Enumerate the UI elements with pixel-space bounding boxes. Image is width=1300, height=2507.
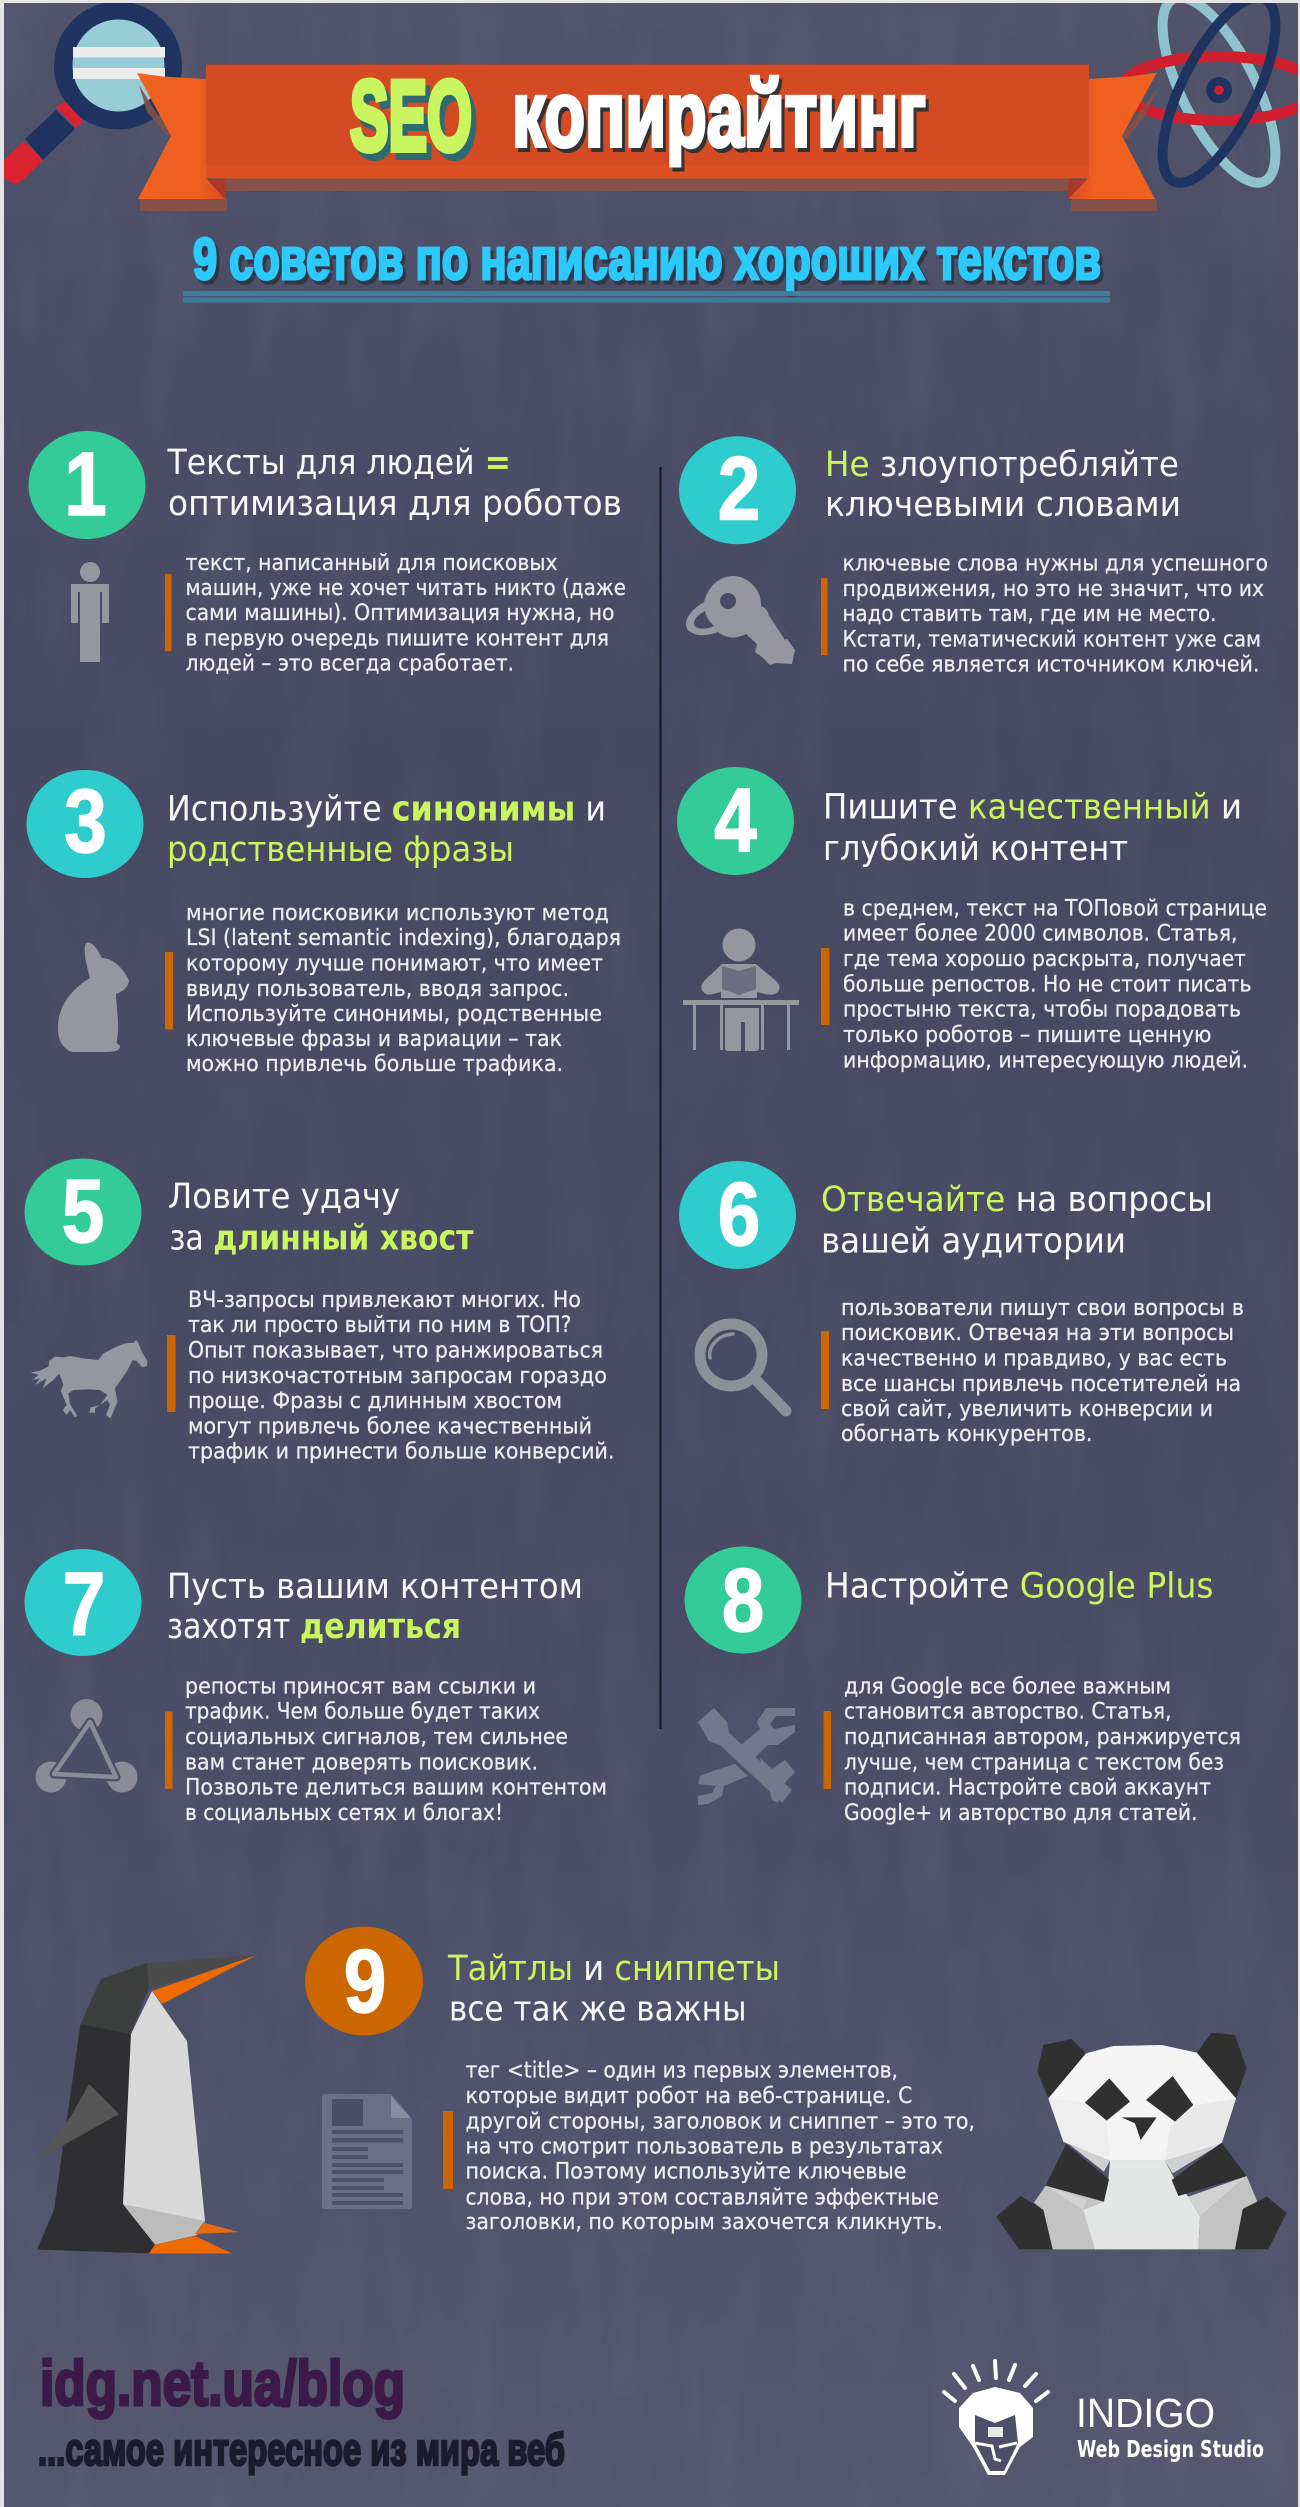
heading tip 7 (167, 1567, 583, 1647)
text tip 9: слова, но при этом составляйте эффектные (466, 2186, 939, 2210)
text tip 4: только роботов – пишите ценную (843, 1023, 1212, 1048)
title banner (137, 60, 1159, 211)
panel: tip 9 (305, 1926, 975, 2235)
heading tip 3: родственные фразы (167, 830, 514, 870)
text tip 4 (843, 896, 1267, 1074)
heading tip 2: Не злоупотребляйте (825, 445, 1179, 485)
text tip 9: заголовки, по которым захочется кликнуть. (466, 2210, 943, 2235)
text tip 3: можно привлечь больше трафика. (186, 1052, 563, 1077)
text tip 5 (188, 1288, 614, 1464)
text tip 8: становится авторство. Статья, (844, 1700, 1172, 1724)
heading tip 4 (823, 788, 1242, 869)
text tip 6: свой сайт, увеличить конверсии и (841, 1397, 1213, 1422)
heading tip 7: захотят делиться (167, 1607, 461, 1647)
subtitle underline (183, 291, 1110, 302)
panel: tip 5 (24, 1158, 614, 1464)
heading tip 1: Тексты для людей = (167, 443, 511, 483)
number badge 8: 8 (722, 1549, 764, 1650)
text tip 5: Опыт показывает, что ранжироваться (188, 1338, 603, 1364)
text tip 9: тег <title> – один из первых элементов, (466, 2058, 898, 2084)
text tip 8: лучше, чем страница с текстом без (844, 1750, 1224, 1776)
panel: tip 4 (677, 767, 1267, 1074)
number badge 1 (28, 431, 146, 539)
text tip 6: качественно и правдиво, у вас есть (841, 1346, 1227, 1372)
accent bar (165, 1712, 172, 1789)
text tip 3: многие поисковики используют метод (186, 901, 609, 926)
panel: tip 2 (679, 436, 1268, 678)
icon: magnifying glass (0, 2, 182, 183)
text tip 6: все шансы привлечь посетителей на (841, 1372, 1241, 1397)
text tip 7: в социальных сетях и блогах! (185, 1801, 503, 1826)
text tip 7 (185, 1674, 607, 1826)
number badge 3: 3 (64, 770, 107, 871)
number badge 4: 4 (714, 769, 757, 870)
icon: person (71, 562, 109, 662)
heading tip 5: Ловите удачу (168, 1177, 400, 1217)
number badge 9: 9 (344, 1930, 386, 2031)
heading tip 6: вашей аудитории (821, 1222, 1126, 1262)
text tip 5: трафик и принести больше конверсий. (188, 1440, 614, 1464)
illustration: penguin (37, 1955, 257, 2254)
text tip 9: другой стороны, заголовок и сниппет – это то, (466, 2110, 975, 2134)
text tip 3: ввиду пользователь, вводя запрос. (186, 977, 569, 1002)
icon: rabbit (58, 942, 129, 1052)
text tip 6: пользователи пишут свои вопросы в (841, 1296, 1244, 1321)
text tip 3: ключевые фразы и вариации – так (186, 1027, 562, 1052)
text tip 4: больше репостов. Но не стоит писать (843, 972, 1252, 998)
number badge 6 (679, 1161, 796, 1269)
text tip 9 (466, 2058, 975, 2235)
panel: tip 3 (26, 770, 621, 1077)
number badge 3 (26, 770, 144, 878)
text tip 4: где тема хорошо раскрыта, получает (843, 947, 1246, 972)
heading tip 4: Пишите качественный и (823, 788, 1242, 828)
text tip 1: сами машины). Оптимизация нужна, но (186, 601, 614, 626)
accent bar (824, 1711, 831, 1789)
text tip 9: поиска. Поэтому используйте ключевые (466, 2160, 906, 2184)
heading tip 3: Используйте синонимы и (167, 790, 606, 830)
number badge 5: 5 (62, 1160, 104, 1261)
banner text: копирайтинг: копирайтинг (512, 62, 926, 166)
text tip 1: в первую очередь пишите контент для (186, 626, 609, 652)
text tip 3: LSI (latent semantic indexing), благодаря (186, 926, 621, 951)
icon: key (686, 576, 795, 665)
text tip 2: по себе является источником ключей. (842, 652, 1260, 678)
text tip 1: машин, уже не хочет читать никто (даже (186, 576, 626, 601)
accent bar (821, 948, 830, 1025)
heading tip 2: ключевыми словами (825, 485, 1181, 525)
text tip 1 (186, 551, 626, 676)
text tip 5: проще. Фразы с длинным хвостом (188, 1389, 562, 1414)
number badge 4 (677, 767, 794, 875)
panel: tip 1 (28, 431, 626, 676)
heading tip 5: за длинный хвост (170, 1218, 474, 1258)
logo text: INDIGO (1076, 2390, 1215, 2436)
panel: tip 8 (684, 1546, 1241, 1826)
logo icon: Indigo gorilla head (944, 2361, 1048, 2475)
text tip 1: людей – это всегда сработает. (186, 652, 514, 676)
text tip 2: надо ставить там, где им не место. (842, 602, 1216, 627)
text tip 6: поисковик. Отвечая на эти вопросы (841, 1321, 1234, 1346)
number badge 5 (24, 1158, 142, 1266)
text tip 2: Кстати, тематический контент уже сам (842, 628, 1261, 652)
text tip 7: трафик. Чем больше будет таких (185, 1700, 540, 1724)
heading tip 9: Тайтлы и сниппеты (447, 1949, 780, 1989)
heading tip 6 (821, 1180, 1213, 1262)
icon: magnifier (700, 1324, 786, 1411)
text tip 4: информацию, интересующую людей. (843, 1048, 1248, 1074)
icon: reader at desk (683, 928, 799, 1051)
heading tip 7: Пусть вашим контентом (167, 1567, 583, 1607)
heading tip 3 (167, 790, 606, 870)
heading tip 8: Настройте Google Plus (825, 1566, 1214, 1606)
number badge 1: 1 (64, 433, 107, 534)
text tip 7: социальных сигналов, тем сильнее (185, 1725, 568, 1750)
number badge 8 (684, 1546, 802, 1654)
banner text: SEO (350, 60, 477, 178)
text tip 6 (841, 1296, 1244, 1447)
icon: wrenches (698, 1708, 795, 1805)
icon: atom (1122, 0, 1300, 198)
banner text: SEO: SEO (355, 67, 477, 178)
text tip 9: на что смотрит пользователь в результатах (466, 2134, 943, 2160)
text tip 5: по низкочастотным запросам гораздо (188, 1364, 607, 1389)
heading tip 2 (825, 445, 1181, 525)
accent bar (443, 2111, 453, 2189)
illustration: panda (996, 2033, 1287, 2249)
text tip 4: простыню текста, чтобы порадовать (843, 998, 1241, 1022)
accent bar (821, 1331, 829, 1409)
heading tip 4: глубокий контент (823, 829, 1128, 869)
text tip 2: продвижения, но это не значит, что их (842, 577, 1264, 602)
text tip 5: ВЧ-запросы привлекают многих. Но (188, 1288, 581, 1313)
panel: tip 6 (679, 1161, 1244, 1447)
number badge 7 (24, 1549, 142, 1656)
text tip 9: которые видит робот на веб-странице. С (466, 2084, 912, 2109)
banner text: SEO: SEO (350, 60, 472, 171)
footer link: idg.net.ua/blog (40, 2349, 405, 2419)
footer tagline: ...самое интересное из мира веб (38, 2424, 565, 2475)
heading tip 1: оптимизация для роботов (168, 484, 622, 524)
text tip 2 (842, 552, 1268, 678)
accent bar (165, 952, 173, 1030)
text tip 2: ключевые слова нужны для успешного (842, 552, 1268, 576)
icon: share triangle (36, 1699, 138, 1792)
heading tip 1 (167, 443, 622, 524)
heading tip 9: все так же важны (449, 1990, 746, 2030)
number badge 9 (305, 1926, 423, 2036)
heading tip 6: Отвечайте на вопросы (821, 1180, 1213, 1220)
logo text (1076, 2390, 1264, 2463)
text tip 8: Google+ и авторство для статей. (844, 1801, 1198, 1826)
text tip 1: текст, написанный для поисковых (186, 551, 558, 576)
icon: horse (31, 1340, 148, 1418)
text tip 8: подписанная автором, ранжируется (844, 1725, 1241, 1750)
text tip 7: Позвольте делиться вашим контентом (185, 1776, 607, 1800)
panel: tip 7 (24, 1549, 607, 1826)
icon: document (322, 2094, 412, 2209)
text tip 3 (186, 901, 621, 1077)
text tip 4: в среднем, текст на ТОПовой странице (843, 896, 1267, 922)
text tip 5: так ли просто выйти по ним в ТОП? (188, 1313, 572, 1338)
text tip 7: вам станет доверять поисковик. (185, 1750, 538, 1776)
accent bar (165, 574, 172, 651)
text tip 8 (844, 1674, 1241, 1826)
text tip 4: имеет более 2000 символов. Статья, (843, 922, 1238, 946)
number badge 6: 6 (718, 1163, 760, 1264)
heading tip 5 (168, 1177, 474, 1258)
heading tip 9 (447, 1949, 780, 2030)
text tip 8: для Google все более важным (844, 1674, 1171, 1700)
number badge 2: 2 (718, 438, 760, 539)
text tip 3: которому лучше понимают, что имеет (186, 952, 603, 976)
accent bar (167, 1335, 176, 1412)
accent bar (821, 578, 828, 655)
text tip 5: могут привлечь более качественный (188, 1414, 592, 1440)
text tip 8: подписи. Настройте свой аккаунт (844, 1776, 1211, 1800)
banner text: копирайтинг: копирайтинг (515, 66, 929, 170)
text tip 3: Используйте синонимы, родственные (186, 1002, 602, 1027)
text tip 7: репосты приносят вам ссылки и (185, 1674, 536, 1700)
text tip 6: обогнать конкурентов. (841, 1422, 1092, 1447)
centre divider line (660, 467, 662, 1729)
number badge 2 (679, 436, 796, 544)
number badge 7: 7 (63, 1553, 105, 1654)
